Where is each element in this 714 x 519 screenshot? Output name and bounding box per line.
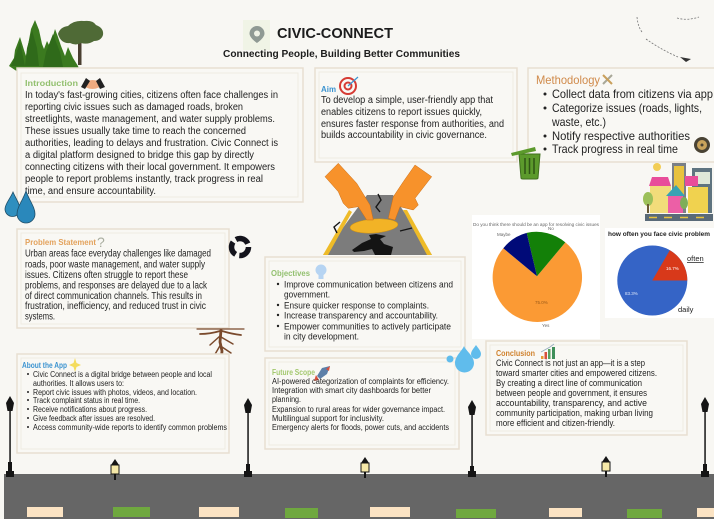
text: problem body: of direct communication channels. This results in (25, 291, 202, 302)
panel: problem statement (17, 229, 229, 328)
text: about bullets: Civic Connect is a digital bridge between people and local (33, 370, 212, 379)
panel: introduction (17, 68, 303, 202)
heading: aim: Aim (321, 84, 336, 94)
text: introduction body: people to report problems instantly, track progress in real (25, 174, 263, 185)
text: aim body (321, 95, 504, 141)
text: about bullets: Give feedback after issues are resolved. (33, 414, 155, 423)
icon: trees (9, 20, 103, 80)
text: conclusion body: more efficient and citizen-friendly. (496, 418, 615, 428)
icon: colorful city (643, 163, 713, 221)
text: objectives bullets: Empower communities to actively participate (284, 322, 451, 332)
text: conclusion body: Civic Connect is not just an app—it is a step (496, 358, 645, 368)
text: about bullets (27, 370, 227, 432)
text: introduction body: These issues usually take time to reach the concerned (25, 126, 246, 137)
icon: light bulb (316, 264, 326, 279)
text: aim body: ensures faster response from authorities, and (321, 119, 504, 130)
panel: future scope (265, 358, 459, 449)
text: about bullets: Receive notifications about progress. (33, 405, 147, 414)
icon: target (340, 77, 358, 94)
text: problem body: systems. (25, 312, 55, 322)
text: introduction body: authorities, leading to delays and frustration. Civic Connect is (25, 138, 278, 149)
pie chart: should there be an app (472, 215, 600, 339)
text: conclusion body: By creating a direct line of communication (496, 378, 642, 388)
text: objectives bullets: government. (284, 290, 330, 300)
chart title: how often you face civic problem (608, 231, 710, 238)
text: future body: Integration with smart city dashboards for better (272, 386, 431, 395)
pie chart: how often you face civic problem: 83.3% (625, 291, 638, 296)
text: conclusion body: community participation, making urban living (496, 408, 653, 418)
panel: objectives (265, 257, 465, 351)
icon: rocket (314, 366, 330, 381)
pie labels: Maybe (497, 232, 511, 237)
pie chart: how often you face civic problem: often (687, 254, 704, 263)
heading: problem statement: Problem Statement (25, 237, 96, 247)
text: problem body: frustration, inefficiency, and reduced trust in civic (25, 301, 206, 312)
heading: future scope: Future Scope (272, 367, 315, 377)
icon: handshake (81, 78, 105, 89)
heading: methodology: Methodology (536, 73, 600, 87)
text: objectives bullets (277, 280, 453, 342)
icon: water drops right (446, 345, 481, 372)
text: introduction body: a digital platform designed to bridge this gap by directly (25, 150, 254, 161)
text: about bullets: Track complaint status in real time. (33, 396, 140, 405)
text: future body: Emergency alerts for floods, power cuts, and accidents (272, 423, 449, 432)
icon: bar chart (541, 344, 555, 359)
text: conclusion body (496, 358, 657, 428)
small street lamps (111, 456, 610, 480)
icon: question mark: ? (97, 234, 105, 250)
text: objectives bullets: Increase transparency and accountability. (284, 310, 438, 320)
heading: introduction: Introduction (25, 78, 78, 88)
text: aim body: enables citizens to report issues quickly, (321, 107, 482, 118)
pie labels: 75.0% (535, 300, 548, 305)
text: problem body (25, 248, 211, 322)
icon: wheel (694, 137, 710, 153)
pie labels: Yes (542, 323, 550, 328)
text: aim body: builds accountability in civic governance. (321, 130, 487, 141)
tall street lamps (6, 396, 709, 477)
heading: objectives: Objectives (271, 268, 310, 278)
heading: about the app: About the App (22, 360, 67, 370)
text: conclusion body: accountability, transparency, and active (496, 398, 647, 408)
pie labels: 16.7% (666, 266, 679, 271)
text: problem body: problems, and responses are delayed due to a lack (25, 280, 208, 292)
text: methodology bullets: Track progress in real time (552, 142, 678, 156)
text: introduction body (25, 90, 278, 197)
icon: trash bin (511, 147, 540, 179)
pie labels (497, 226, 554, 328)
text: objectives bullets: Improve communication between citizens and (284, 280, 453, 290)
text: future body: Multilingual support for inclusivity. (272, 414, 384, 423)
text: introduction body: connecting citizens with their local government. It empowers (25, 162, 275, 173)
text: conclusion body: toward smarter cities and empowered citizens. (496, 368, 657, 378)
text: introduction body: streetlights, waste management, and water supply problems. (25, 114, 275, 125)
pie chart: how often you face civic problem (605, 228, 714, 318)
icon: water drops left (5, 191, 35, 223)
pie labels: No (548, 226, 554, 231)
text: introduction body: time, and ensure accountability. (25, 186, 156, 197)
icon: recycle (232, 238, 248, 256)
subtitle: Connecting People, Building Better Communities (223, 48, 460, 60)
text: objectives bullets: in city development. (284, 332, 359, 342)
text: introduction body: reporting civic issues such as damaged roads, broken (25, 102, 243, 113)
icon: dashed plane path (637, 17, 699, 62)
text: objectives bullets: Ensure quicker response to complaints. (284, 300, 429, 310)
text: future body: Expansion to rural areas for wider governance impact. (272, 405, 445, 414)
text: methodology bullets: Notify respective authorities (552, 129, 690, 143)
panel: about the app (17, 354, 229, 453)
text: conclusion body: between people and government, it ensures (496, 388, 648, 398)
text: problem body: roads, poor waste management, and water supply (25, 260, 205, 270)
text: future body: AI-powered categorization of complaints for efficiency. (272, 377, 449, 386)
text: future body (272, 377, 449, 432)
heading: conclusion: Conclusion (496, 348, 535, 358)
text: aim body: To develop a simple, user-friendly app that (321, 95, 493, 106)
text: problem body: Urban areas face everyday challenges like damaged (25, 248, 211, 260)
pie chart: how often you face civic problem: daily (678, 305, 694, 314)
text: problem body: issues. Citizens often struggle to report these (25, 270, 188, 281)
text: about bullets: authorities. It allows users to: (33, 379, 124, 388)
road with lane markings (4, 474, 714, 519)
panel: methodology (528, 68, 714, 162)
icon: tools (603, 75, 612, 84)
panel: conclusion (486, 341, 687, 435)
chart title: Do you think there should be an app for resolving civic issues (473, 222, 600, 227)
panel: aim (315, 68, 517, 162)
text: introduction body: In today's fast-growing cities, citizens often face challenges in (25, 90, 278, 101)
icon: tree roots (197, 329, 244, 362)
text: methodology bullets (544, 87, 713, 156)
text: methodology bullets: waste, etc.) (551, 115, 606, 129)
text: future body: planning. (272, 395, 301, 404)
text: about bullets: Access community-wide reports to identify common problems (33, 423, 227, 432)
title: CIVIC-CONNECT (277, 25, 393, 42)
text: about bullets: Report civic issues with photos, videos, and location. (33, 388, 197, 397)
icon: map pin logo (243, 20, 270, 50)
illustration: hands fixing cracked road (323, 163, 432, 255)
icon: sparkle (69, 358, 81, 372)
